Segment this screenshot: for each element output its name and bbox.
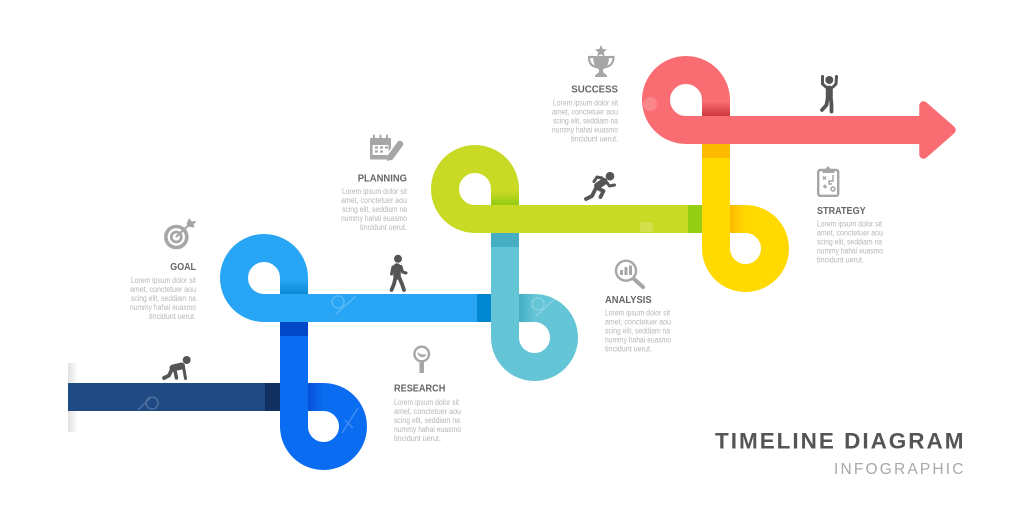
heading and text: planning: PLANNING bbox=[358, 172, 407, 184]
icon: analysis magnifier bbox=[616, 261, 643, 287]
loop: teal analysis bbox=[491, 233, 564, 367]
heading and text: strategy: scing elit, seddiam na bbox=[817, 238, 882, 247]
heading and text: planning bbox=[341, 172, 408, 232]
icon: clipboard strategy bbox=[818, 167, 838, 196]
heading and text: goal bbox=[130, 261, 197, 321]
icon: magnifier with leaf bbox=[414, 347, 429, 373]
heading and text: research: scing elit, seddiam na bbox=[394, 416, 460, 425]
heading and text: research: tincidunt uerut. bbox=[394, 434, 441, 443]
heading and text: success: scing elit, seddiam na bbox=[553, 116, 618, 125]
heading and text: planning: amet, conctetuer aou bbox=[341, 196, 407, 205]
figure: crawling person bbox=[164, 356, 191, 378]
heading and text: planning: scing elit, seddiam na bbox=[342, 205, 407, 214]
heading and text: planning: Lorem ipsum dolor sit bbox=[342, 187, 408, 196]
heading and text: goal: Lorem ipsum dolor sit bbox=[131, 276, 197, 285]
heading and text: analysis: ANALYSIS bbox=[605, 294, 652, 306]
icon: trophy bbox=[589, 45, 614, 77]
heading and text: research: Lorem ipsum dolor sit bbox=[394, 398, 460, 407]
heading and text: strategy: nummy hahai euasmo bbox=[817, 247, 883, 256]
heading and text: goal: scing elit, seddiam na bbox=[131, 294, 196, 303]
heading and text: success: SUCCESS bbox=[571, 84, 618, 96]
loop: green planning bbox=[445, 159, 702, 233]
arrow: red success bbox=[643, 70, 952, 154]
loop: blue research bbox=[280, 322, 358, 456]
heading and text: strategy: amet, conctetuer aou bbox=[817, 229, 883, 238]
title: TIMELINE DIAGRAM bbox=[715, 428, 964, 453]
figure: running person bbox=[586, 172, 614, 199]
heading and text: goal: tincidunt uerut. bbox=[149, 312, 196, 321]
figure: cheering person bbox=[822, 76, 836, 112]
figure: walking person bbox=[392, 255, 406, 290]
heading and text: strategy bbox=[817, 205, 883, 265]
heading and text: analysis: nummy hahai euasmo bbox=[605, 336, 671, 344]
heading and text: success: tincidunt uerut. bbox=[571, 134, 618, 143]
icon: target bbox=[166, 219, 196, 248]
heading and text: success: amet, conctetuer aou bbox=[552, 107, 618, 116]
heading and text: research: amet, conctetuer aou bbox=[394, 407, 461, 416]
heading and text: goal: amet, conctetuer aou bbox=[130, 285, 196, 294]
heading and text: strategy: Lorem ipsum dolor sit bbox=[817, 220, 883, 229]
heading and text: research: RESEARCH bbox=[394, 382, 445, 394]
heading and text: research bbox=[394, 382, 461, 443]
loop: light blue goal bbox=[234, 248, 491, 322]
heading and text: goal: nummy hahai euasmo bbox=[130, 303, 196, 312]
heading and text: success: Lorem ipsum dolor sit bbox=[553, 98, 619, 107]
heading and text: strategy: tincidunt uerut. bbox=[817, 256, 864, 265]
heading and text: analysis: amet, conctetuer aou bbox=[605, 318, 671, 327]
heading and text: research: nummy hahai euasmo bbox=[394, 425, 461, 434]
heading and text: planning: tincidunt uerut. bbox=[360, 223, 407, 232]
heading and text: success bbox=[552, 84, 619, 143]
heading and text: success: nummy hahai euasmo bbox=[552, 125, 618, 134]
heading and text: analysis: Lorem ipsum dolor sit bbox=[605, 309, 671, 318]
title: INFOGRAPHIC bbox=[834, 461, 964, 478]
heading and text: strategy: STRATEGY bbox=[817, 205, 866, 217]
heading and text: analysis: tincidunt uerut. bbox=[605, 344, 652, 354]
title bbox=[715, 428, 964, 478]
loop: yellow strategy bbox=[702, 144, 775, 278]
start bar: navy bbox=[68, 363, 280, 432]
heading and text: planning: nummy hahai euasmo bbox=[341, 214, 407, 223]
heading and text: goal: GOAL bbox=[170, 261, 196, 273]
heading and text: analysis: scing elit, seddiam na bbox=[605, 326, 670, 336]
icon: calendar and pencil bbox=[370, 136, 400, 161]
heading and text: analysis bbox=[605, 294, 671, 354]
